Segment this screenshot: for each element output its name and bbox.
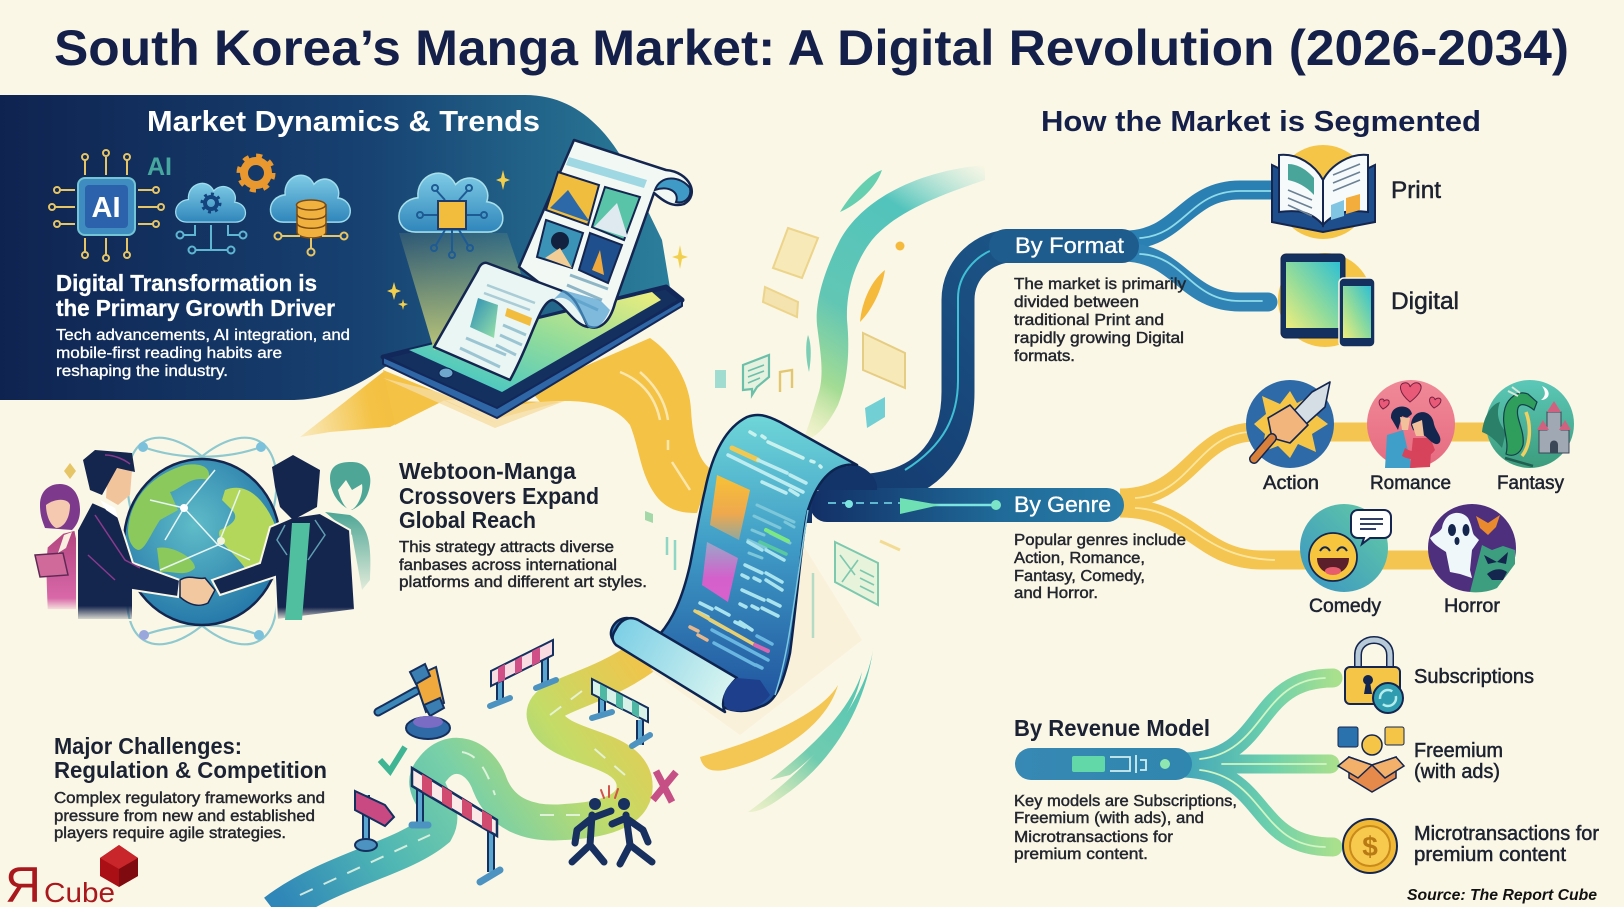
icon: padlock xyxy=(1345,640,1403,713)
label: horror: Horror xyxy=(1444,596,1501,617)
icon: fantasy xyxy=(1482,380,1574,468)
icon: red x xyxy=(653,771,676,802)
pipeline: trunk highlight xyxy=(905,250,992,470)
text: genre description: Fantasy, Comedy, xyxy=(1014,568,1145,585)
text: major challenges: Regulation & Competition xyxy=(54,757,327,783)
text: major challenges: players require agile strategies. xyxy=(54,825,286,842)
panel: tablet illustration xyxy=(383,140,692,418)
text: format description: The market is primarily xyxy=(1014,276,1186,293)
icon: comedy xyxy=(1300,504,1391,592)
icon: AI chip: AI xyxy=(92,192,120,224)
text: digital transformation: mobile-first reading habits are xyxy=(56,345,282,362)
text: webtoon crossovers: This strategy attracts diverse xyxy=(399,539,614,556)
text: webtoon crossovers: fanbases across international xyxy=(399,557,617,574)
icon: big barrier xyxy=(412,768,500,882)
text: revenue description: premium content. xyxy=(1014,846,1148,863)
text: digital transformation: Digital Transformation is xyxy=(56,270,317,296)
text: webtoon crossovers: Webtoon-Manga xyxy=(399,458,576,484)
figure: teal person xyxy=(325,462,370,590)
heading: how the market is segmented: How the Market is Segmented xyxy=(1041,106,1481,138)
upper comic page xyxy=(519,140,692,328)
icon: AI chip xyxy=(49,150,164,261)
scroll bottom roll xyxy=(613,618,737,712)
heading: market dynamics: Market Dynamics & Trends xyxy=(147,106,540,138)
text: digital transformation: the Primary Growth Driver xyxy=(56,295,335,321)
panel: market dynamics banner xyxy=(0,95,672,400)
figure: left man xyxy=(77,450,180,620)
label: freemium xyxy=(1414,740,1503,783)
handshake xyxy=(180,577,215,605)
title: South Korea’s Manga Market: A Digital Revolution (2026-2034) xyxy=(54,20,1569,76)
label: subscriptions: Subscriptions xyxy=(1414,666,1534,688)
panel: revenue model pill xyxy=(1015,748,1192,780)
scroll shadow xyxy=(650,540,862,735)
pipeline: by format trunk xyxy=(870,246,1125,490)
panel: by genre bar: By Genre xyxy=(1014,492,1111,517)
icon: dollar coin: $ xyxy=(1362,831,1378,862)
text: revenue description xyxy=(1014,793,1237,863)
text: revenue description: Freemium (with ads), and xyxy=(1014,810,1204,827)
icon: freemium box xyxy=(1338,727,1404,792)
icon: digital devices xyxy=(1278,253,1375,347)
text: genre description: Action, Romance, xyxy=(1014,550,1145,567)
icon: romance xyxy=(1367,380,1455,468)
text: webtoon crossovers: Crossovers Expand xyxy=(399,483,599,509)
label: AI: AI xyxy=(147,153,172,181)
icon: green check xyxy=(380,747,405,771)
label: microtransactions: Microtransactions for xyxy=(1414,823,1599,845)
globe xyxy=(124,459,280,625)
icon: cloud with database xyxy=(270,175,350,256)
text: webtoon crossovers xyxy=(399,458,647,591)
pipeline: revenue branches xyxy=(1185,678,1333,847)
scroll purple panel xyxy=(702,542,738,602)
text: format description: divided between xyxy=(1014,294,1139,311)
icon: horror xyxy=(1428,504,1516,592)
text: format description: rapidly growing Digital xyxy=(1014,330,1184,347)
orbit rings xyxy=(97,414,307,668)
text: webtoon crossovers: platforms and different art styles. xyxy=(399,574,647,591)
text: genre description xyxy=(1014,532,1186,602)
pipeline: format branches xyxy=(1125,190,1285,302)
panel: by format pill: By Format xyxy=(1015,233,1124,258)
icon: sparkles xyxy=(64,170,688,479)
icon: action xyxy=(1246,380,1334,468)
logo: report cube: Я xyxy=(5,857,41,913)
swoosh: lower teal and yellow strokes xyxy=(700,650,873,812)
label: microtransactions: premium content xyxy=(1414,844,1566,866)
text: revenue description: Key models are Subscriptions, xyxy=(1014,793,1237,810)
icon: orange gear xyxy=(239,156,273,190)
panel: by format pill xyxy=(989,229,1139,263)
bottom white strip xyxy=(0,907,1624,917)
source note: Source: The Report Cube xyxy=(1407,887,1597,904)
text: digital transformation: Tech advancements, AI integration, and xyxy=(56,327,350,344)
lower news page xyxy=(434,263,610,380)
text: format description: formats. xyxy=(1014,348,1075,365)
icon: cloud with gear xyxy=(176,183,246,254)
text: revenue description: Microtransactions for xyxy=(1014,829,1174,846)
label: digital: Digital xyxy=(1391,288,1459,315)
icon: right barrier xyxy=(592,679,650,746)
logo: report cube: Cube xyxy=(44,877,115,908)
label: fantasy: Fantasy xyxy=(1497,473,1564,494)
label: microtransactions xyxy=(1414,823,1599,866)
text: major challenges xyxy=(54,733,327,842)
icon: competing figures xyxy=(572,786,652,864)
light beam xyxy=(399,233,530,350)
icon: road sign xyxy=(355,791,394,851)
text: major challenges: pressure from new and established xyxy=(54,808,315,825)
icon: dollar coin xyxy=(1343,819,1397,873)
illustration: central scroll xyxy=(611,415,877,712)
label: comedy: Comedy xyxy=(1309,596,1382,617)
text: format description xyxy=(1014,276,1186,365)
panel: by genre bar xyxy=(810,488,1124,522)
logo: report cube xyxy=(5,845,138,913)
scroll text lines xyxy=(690,432,821,668)
yellow ribbon under tablet xyxy=(300,338,712,513)
figure: woman with book xyxy=(35,484,80,610)
label: freemium: (with ads) xyxy=(1414,761,1500,783)
swoosh: top teal stream xyxy=(803,165,985,440)
text: major challenges: Complex regulatory frameworks and xyxy=(54,790,325,807)
heading: by revenue model: By Revenue Model xyxy=(1014,715,1210,741)
text: genre description: and Horror. xyxy=(1014,585,1098,602)
text: webtoon crossovers: Global Reach xyxy=(399,507,536,533)
faded floating icons xyxy=(645,228,905,638)
panel: challenges road xyxy=(275,657,643,912)
label: romance: Romance xyxy=(1370,473,1451,494)
text: digital transformation xyxy=(56,270,350,380)
label: print: Print xyxy=(1391,177,1441,204)
icon: gavel xyxy=(378,664,450,739)
label: action: Action xyxy=(1263,473,1319,494)
pipeline: genre branches xyxy=(1120,432,1520,560)
text: digital transformation: reshaping the industry. xyxy=(56,363,228,380)
figure: right silhouette xyxy=(212,455,355,620)
icon: top barrier xyxy=(490,640,556,706)
text: genre description: Popular genres include xyxy=(1014,532,1186,549)
label: freemium: Freemium xyxy=(1414,740,1503,762)
text: major challenges: Major Challenges: xyxy=(54,733,242,759)
scroll yellow panel xyxy=(710,475,750,540)
icon: print book xyxy=(1272,145,1375,239)
icon: cloud with chip xyxy=(399,173,503,258)
illustration: global handshake xyxy=(35,414,370,668)
text: format description: traditional Print and xyxy=(1014,312,1164,329)
